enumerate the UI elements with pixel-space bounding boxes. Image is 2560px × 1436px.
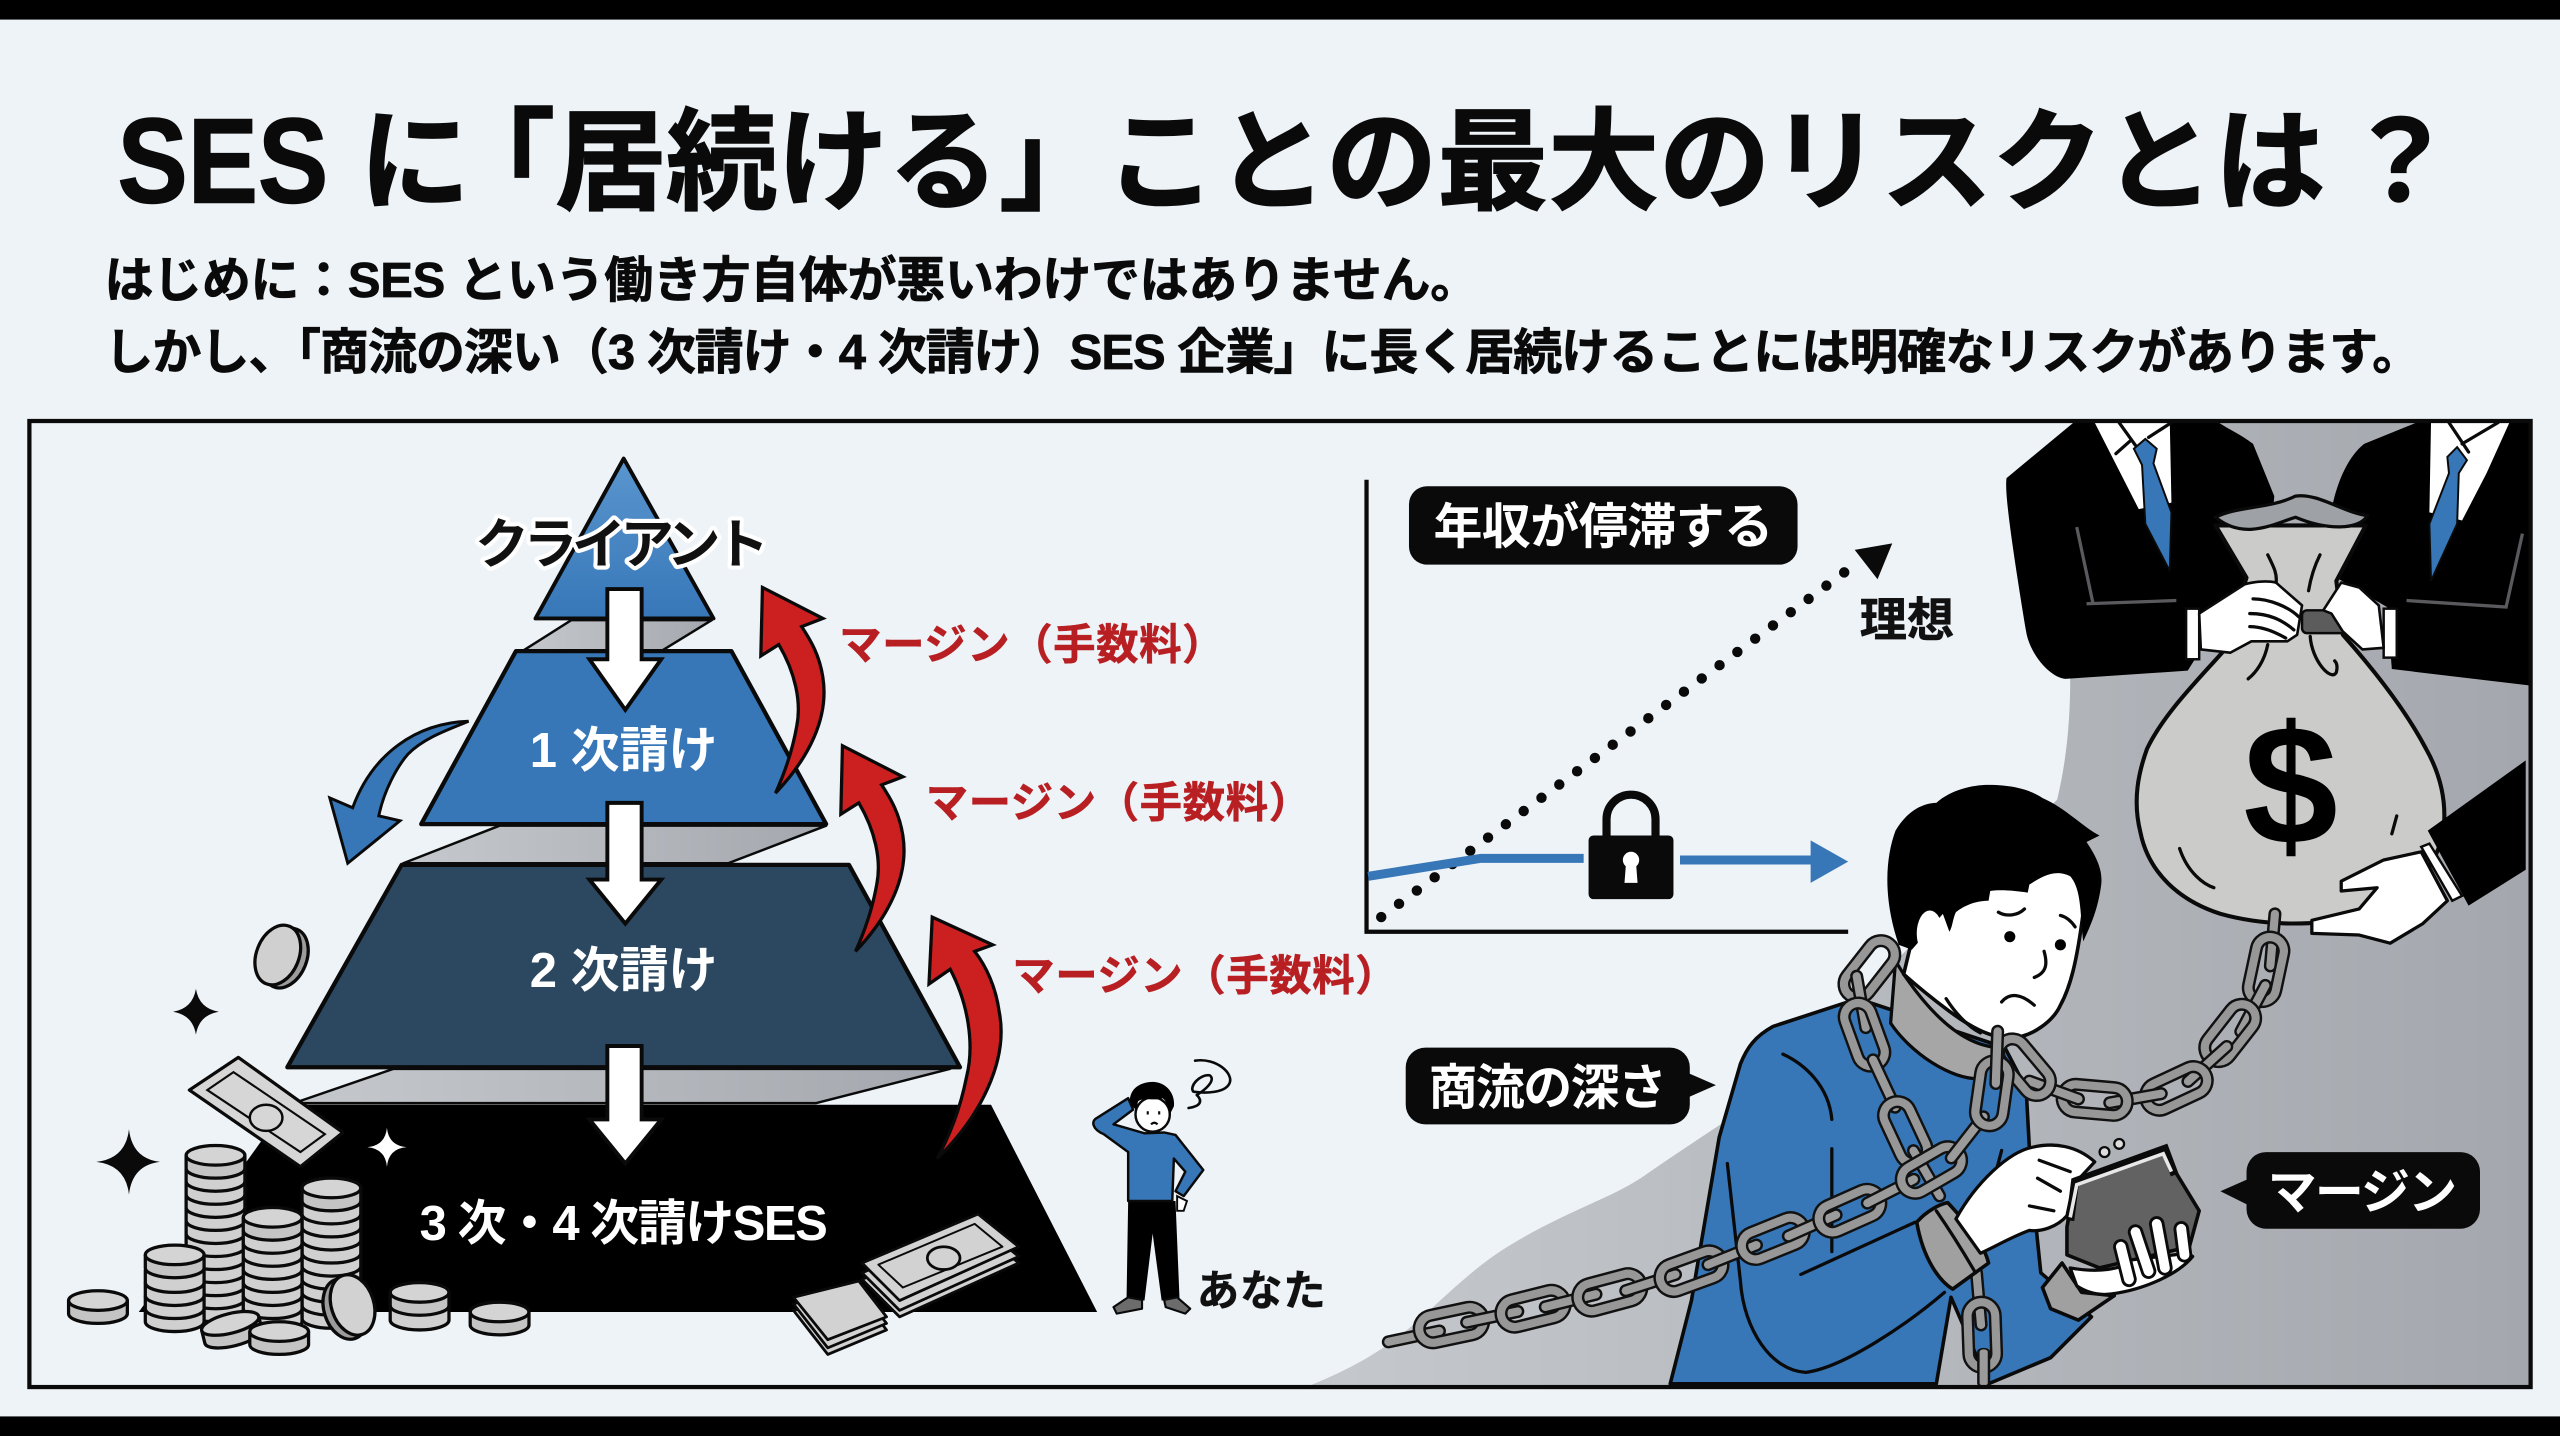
tier: client: [536, 459, 713, 618]
title: に: [359, 101, 470, 225]
chart: annual income stagnation: [1367, 480, 1954, 932]
intro text: しかし、「商流の深い（3 次請け・4 次請け）SES 企業」に長く居続けることには明確なリスクがあります。: [104, 326, 2421, 380]
tier labels: クライアント: [475, 515, 769, 575]
icon: banknote stacks: [793, 1214, 1019, 1354]
arrow: blue curved: [330, 721, 469, 863]
shoes: [1113, 1297, 1190, 1314]
tier: first-level: [421, 651, 826, 824]
coin stacks: [69, 1146, 529, 1354]
collar: [1891, 961, 2002, 1079]
hand under wallet: [2070, 1224, 2193, 1294]
dollar sign: $: [2243, 690, 2338, 880]
ear: [1917, 911, 1943, 956]
left suit: [2006, 423, 2274, 679]
sparkles: [96, 989, 407, 1194]
connector faces: [294, 620, 950, 1103]
head: [1136, 1097, 1170, 1132]
chain to the bag: [1993, 914, 2286, 1117]
right suit: [2333, 423, 2529, 685]
label: depth of commercial flow: 商流の深さ: [1429, 1062, 1667, 1116]
arrows: red margin: [761, 587, 1001, 1159]
icon: coin purse wallet: [2067, 1139, 2199, 1268]
long chain to the ground: [1388, 1031, 2010, 1345]
hand at hip: [1177, 1196, 1187, 1211]
handcuff right: [2042, 1263, 2114, 1320]
label: you: あなた: [1197, 1267, 1326, 1314]
title: ？: [2344, 101, 2456, 225]
pockets: [2077, 527, 2522, 607]
label: annual income stagnates: [1409, 486, 1798, 565]
label: depth of commercial flow: [1406, 1048, 1716, 1124]
icon: tilted banknote: [189, 1057, 343, 1167]
margin labels: [839, 621, 1398, 1000]
intro text: [104, 254, 2421, 380]
face: [1904, 857, 2083, 1038]
margin labels: マージン（手数料）: [926, 780, 1311, 827]
label: margin: マージン: [2268, 1166, 2457, 1220]
panel: main illustration frame: [29, 421, 2531, 1387]
trousers: [1127, 1201, 1180, 1301]
pyramid: [139, 459, 1097, 1312]
icon: money bag: [2137, 496, 2444, 924]
pyramid: 2 次請け: [530, 944, 718, 998]
margin labels: マージン（手数料）: [839, 621, 1224, 668]
intro text: はじめに：SES という働き方自体が悪いわけではありません。: [104, 254, 1479, 308]
title: SES: [118, 93, 328, 228]
shirts: [2095, 423, 2171, 509]
flow arrows down: [589, 589, 661, 1163]
pyramid: 1 次請け: [530, 724, 718, 778]
margin labels: マージン（手数料）: [1012, 953, 1398, 1000]
pyramid: 3 次・4 次請けSES: [420, 1197, 828, 1251]
icon: padlock: [1589, 795, 1673, 899]
hair: [1130, 1082, 1174, 1116]
icon: flying coin: [246, 918, 317, 995]
chart: stagnant blue line: [1368, 840, 1848, 883]
label: margin: [2220, 1152, 2480, 1229]
facial features: [1946, 909, 2075, 1033]
chain from handcuff: [1967, 1273, 1997, 1383]
label: annual income stagnates: 年収が停滞する: [1433, 500, 1773, 554]
hand on wallet: [1956, 1145, 2095, 1253]
clothing folds: [1727, 1054, 2002, 1372]
confusion swirl: [1189, 1060, 1230, 1108]
title: 」: [999, 101, 1110, 225]
label: ideal: 理想: [1860, 594, 1954, 647]
top black bar: [0, 0, 2560, 20]
grey backdrop behind the man: [1306, 421, 2531, 1387]
chain around the neck: [1838, 935, 1940, 1196]
collar lines: [2116, 423, 2498, 454]
ties: [2134, 439, 2171, 571]
title: 「: [444, 101, 555, 225]
figure: chained man: [1388, 785, 2286, 1384]
bottom black bar: [0, 1416, 2560, 1436]
title: ことの最大のリスクとは: [1105, 101, 2325, 225]
figure: suited men: [2006, 423, 2529, 685]
handcuff left: [1917, 1203, 1989, 1289]
title: [118, 93, 2456, 228]
title: 居続ける: [555, 101, 999, 225]
hands holding the bag: [2186, 581, 2526, 943]
face marks: [1148, 1111, 1159, 1124]
chart axes: [1367, 480, 1848, 932]
chart: dotted ideal line: [1381, 543, 1892, 917]
figure: small worried person: [1093, 1060, 1230, 1314]
torso: [1670, 999, 2091, 1384]
shirt: [1093, 1098, 1203, 1201]
hair: [1887, 785, 2101, 950]
tier: second-level: [287, 865, 960, 1067]
frame border: [29, 421, 2531, 1387]
finger lines: [2029, 1160, 2070, 1211]
tier: third and fourth level: [139, 1105, 1097, 1312]
